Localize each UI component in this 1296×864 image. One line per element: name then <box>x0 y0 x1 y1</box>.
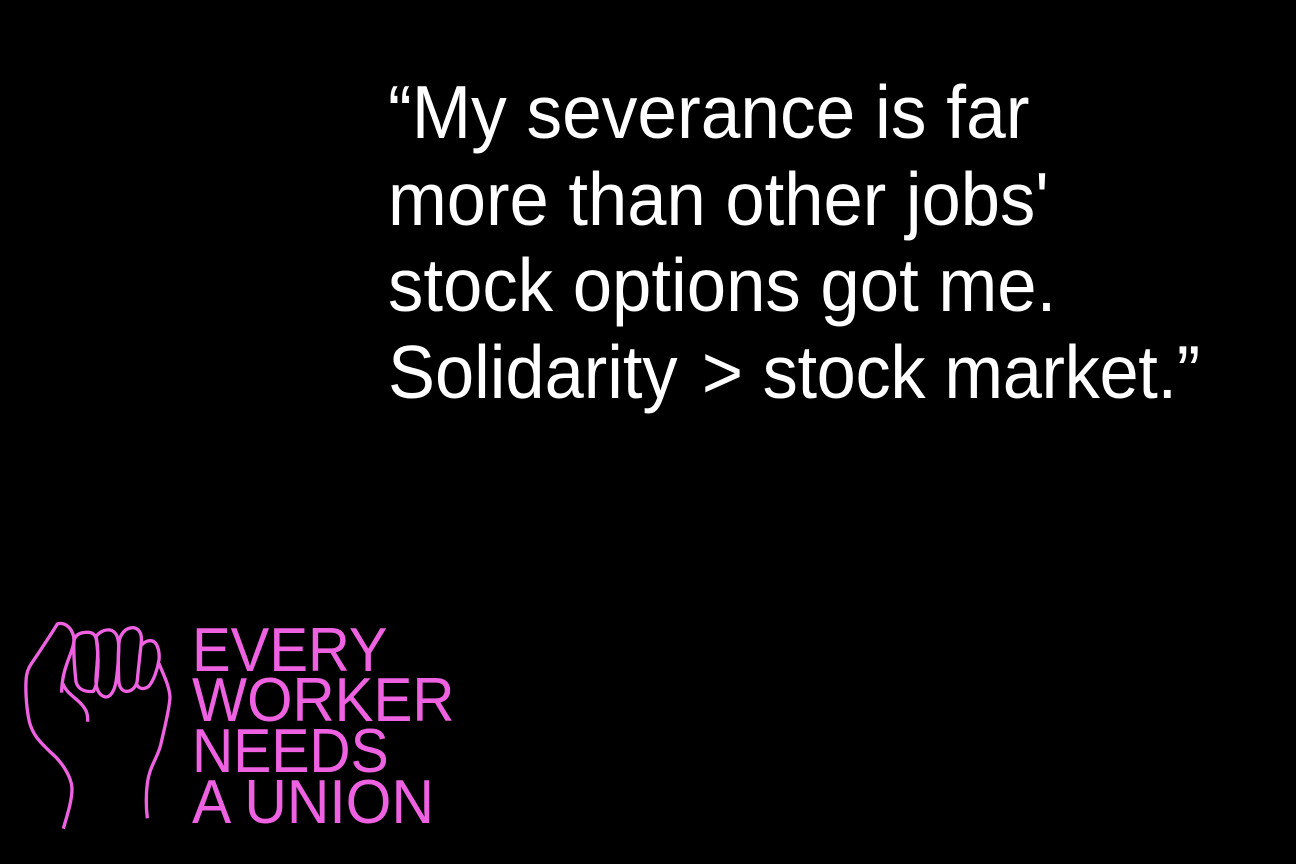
icon: raised fist <box>24 622 172 830</box>
quote text: stock options got me. <box>388 243 1056 327</box>
slogan: every worker needs a union <box>192 616 455 837</box>
slogan: every worker needs a union: WORKER <box>192 666 455 735</box>
slogan: every worker needs a union: NEEDS <box>192 717 389 786</box>
slogan: every worker needs a union: A UNION <box>192 768 434 837</box>
quote text: more than other jobs' <box>388 157 1049 241</box>
quote text: “My severance is far <box>388 70 1029 154</box>
quote text: Solidarity > stock market.” <box>388 330 1200 414</box>
quote text <box>388 70 1200 414</box>
slogan: every worker needs a union: EVERY <box>192 616 387 684</box>
